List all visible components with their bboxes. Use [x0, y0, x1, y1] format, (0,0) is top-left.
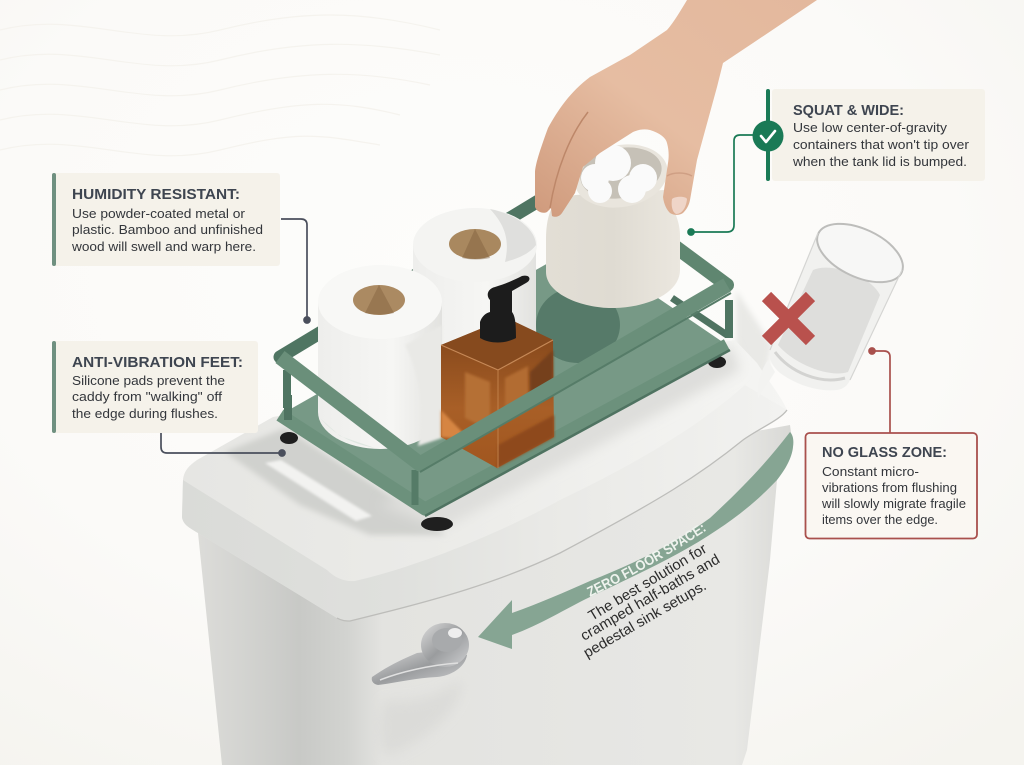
- text: no glass body: will slowly migrate fragile: [821, 496, 966, 511]
- rack upper front rails: [280, 285, 731, 505]
- text: anti-vibration body: the edge during flushes.: [72, 406, 218, 421]
- panel: humidity resistant: [52, 173, 280, 266]
- text: squat body: [792, 120, 970, 169]
- heading: no glass zone: NO GLASS ZONE:: [822, 444, 947, 461]
- connector: humidity: [281, 219, 310, 323]
- icon: cotton balls: [581, 145, 657, 203]
- text: zero floor body: The best solution for: [586, 541, 710, 624]
- icon: pump: [480, 276, 529, 342]
- text: squat body: Use low center-of-gravity: [793, 120, 948, 135]
- heading: zero floor space: ZERO FLOOR SPACE:: [586, 524, 706, 597]
- text: squat body: containers that won't tip over: [793, 137, 970, 152]
- candle in glass: [757, 212, 912, 398]
- text: anti-vibration body: Silicone pads prevent the: [72, 373, 225, 388]
- panel: squat and wide: [766, 89, 985, 181]
- text: no glass body: [821, 464, 966, 527]
- text: anti-vibration body: [72, 373, 225, 421]
- text: zero floor body: pedestal sink setups.: [581, 578, 709, 661]
- hand: [535, 0, 817, 217]
- connector: anti-vibration: [161, 433, 285, 456]
- text: no glass body: vibrations from flushing: [822, 480, 957, 495]
- text: humidity body: plastic. Bamboo and unfinished: [72, 222, 263, 237]
- icon: green check: [752, 120, 784, 152]
- connector: squat: [688, 135, 753, 235]
- icon: rack feet: [280, 356, 726, 531]
- text: no glass body: items over the edge.: [822, 512, 938, 527]
- panel: anti-vibration feet: [52, 341, 258, 433]
- text: squat body: when the tank lid is bumped.: [792, 154, 967, 169]
- jar: [546, 137, 680, 308]
- toilet tank lid: [182, 340, 787, 621]
- toilet tank body: [198, 425, 793, 765]
- text: humidity body: [71, 206, 263, 254]
- text: humidity body: wood will swell and warp here.: [71, 239, 256, 254]
- text: humidity body: Use powder-coated metal or: [72, 206, 246, 221]
- panel: no glass zone: [806, 433, 977, 538]
- arrow: zero floor space: [478, 432, 794, 649]
- toilet paper roll front: [318, 265, 442, 449]
- text: no glass body: Constant micro-: [822, 464, 919, 479]
- connector: no glass: [869, 348, 890, 433]
- rack lower tray: [280, 245, 730, 516]
- toilet paper roll back: [413, 208, 537, 345]
- heading: squat and wide: SQUAT & WIDE:: [793, 102, 904, 119]
- rack back rails: [280, 200, 727, 357]
- soap bottle: [441, 276, 554, 468]
- soft shadow behind tank: [736, 290, 772, 395]
- text: zero floor body: cramped half-baths and: [578, 552, 723, 644]
- flush handle: [372, 623, 469, 685]
- text: anti-vibration body: caddy from "walking" off: [72, 389, 222, 404]
- icon: red x: [766, 296, 810, 340]
- heading: anti-vibration feet: ANTI-VIBRATION FEET:: [72, 354, 243, 371]
- heading: humidity resistant: HUMIDITY RESISTANT:: [72, 186, 240, 203]
